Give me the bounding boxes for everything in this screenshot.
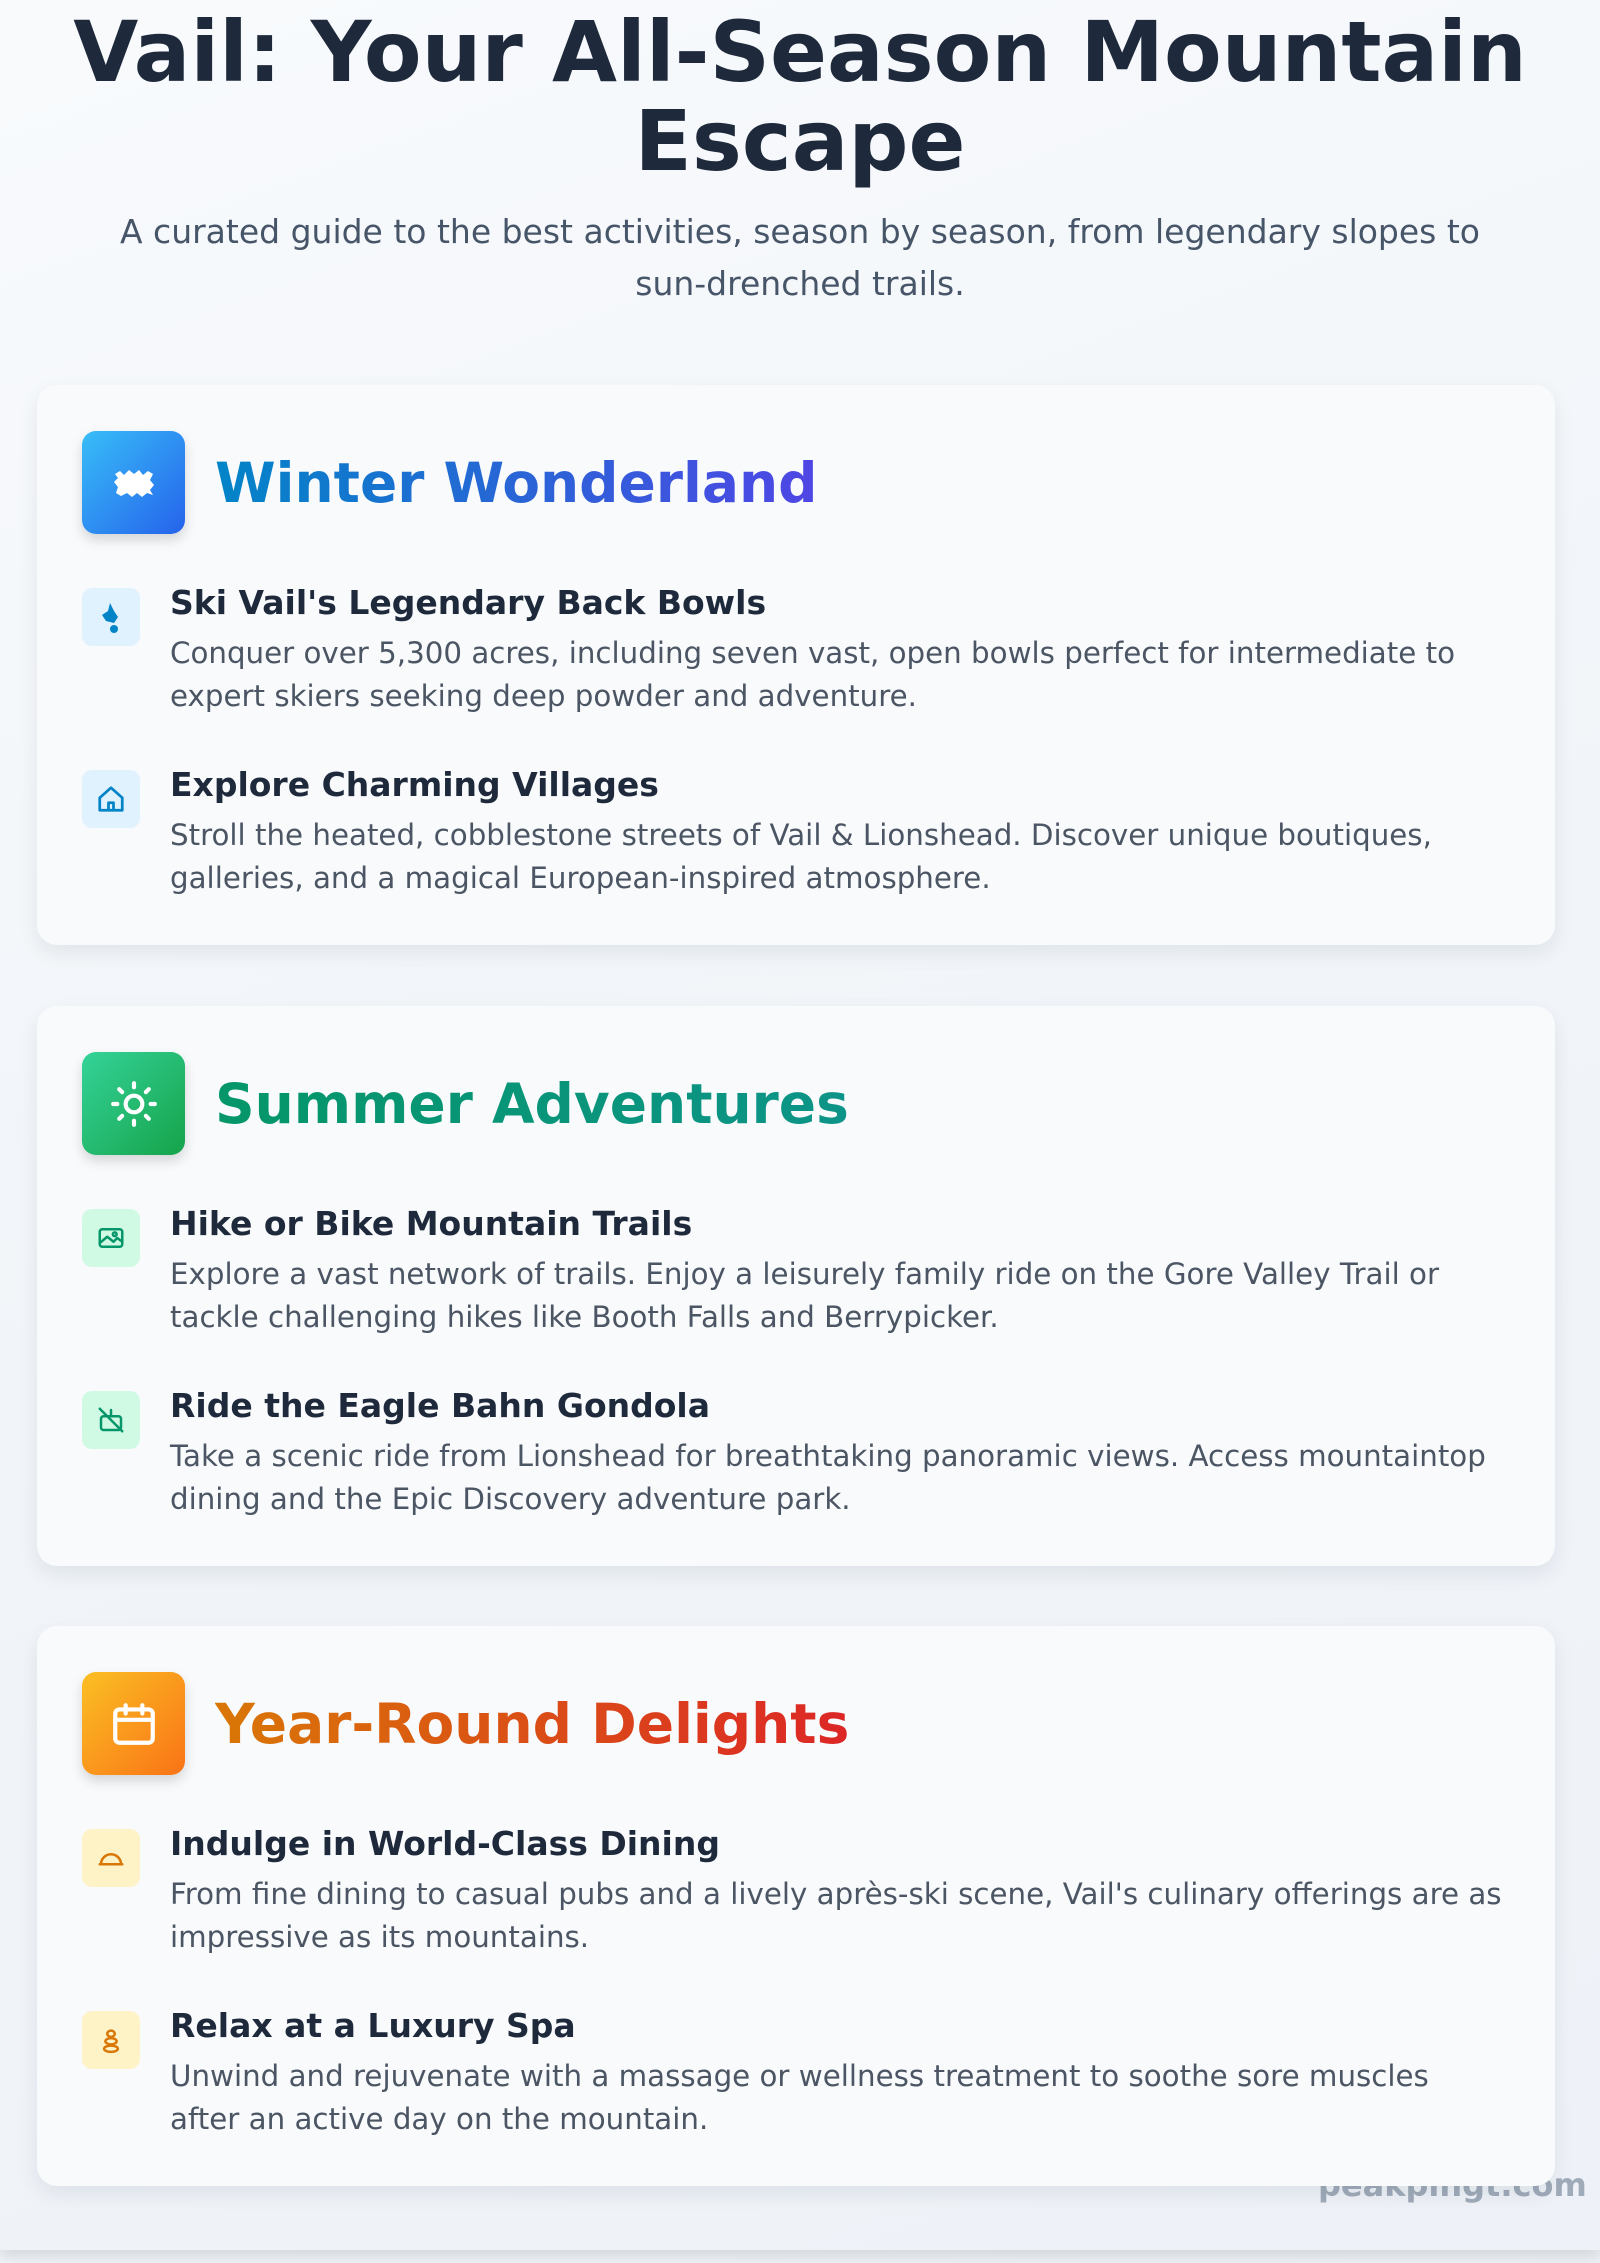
item: trails: Hike or Bike Mountain Trails bbox=[170, 1204, 692, 1243]
item: gondola: Take a scenic ride from Lionshead for breathtaking panoramic views. Access mountaintop dining and the Epic Discovery adventure park. bbox=[170, 1439, 1486, 1516]
title: Vail: Your All-Season Mountain bbox=[73, 3, 1527, 101]
item: villages bbox=[82, 765, 1432, 895]
heading: year-round: Year-Round Delights bbox=[215, 1692, 849, 1756]
item: villages: Explore Charming Villages bbox=[170, 765, 659, 804]
heading: winter bbox=[78, 431, 817, 544]
item: dining: Indulge in World-Class Dining bbox=[170, 1824, 720, 1863]
item: trails: Explore a vast network of trails. Enjoy a leisurely family ride on the Gore Valley Trail or tackle challenging hikes like Booth Falls and Berrypicker. bbox=[170, 1257, 1439, 1334]
panel: summer bbox=[37, 1006, 1555, 1566]
heading: winter: Winter Wonderland bbox=[215, 450, 817, 514]
heading: year-round bbox=[78, 1672, 849, 1786]
subtitle: A curated guide to the best activities, season by season, from legendary slopes to sun-drenched trails. bbox=[120, 212, 1480, 303]
item: spa: Unwind and rejuvenate with a massage or wellness treatment to soothe sore muscles after an active day on the mountain. bbox=[170, 2059, 1429, 2136]
item: villages: Stroll the heated, cobblestone streets of Vail & Lionshead. Discover unique boutiques, galleries, and a magical European-inspired atmosphere. bbox=[170, 818, 1432, 895]
item: back bowls bbox=[82, 583, 1455, 713]
item: dining bbox=[82, 1824, 1502, 1954]
panel: winter bbox=[37, 385, 1555, 945]
item: trails bbox=[82, 1204, 1440, 1334]
item: back bowls: Conquer over 5,300 acres, including seven vast, open bowls perfect for intermediate to expert skiers seeking deep powder and adventure. bbox=[170, 636, 1455, 713]
title: Escape bbox=[635, 92, 965, 190]
heading: summer bbox=[78, 1052, 849, 1166]
item: spa bbox=[82, 2006, 1429, 2136]
panel: year-round bbox=[37, 1626, 1555, 2186]
watermark: peakpingt.com bbox=[1318, 2166, 1587, 2204]
item: back bowls: Ski Vail's Legendary Back Bowls bbox=[170, 583, 766, 622]
item: gondola: Ride the Eagle Bahn Gondola bbox=[170, 1386, 710, 1425]
item: dining: From fine dining to casual pubs and a lively après-ski scene, Vail's culinary offerings are as impressive as its mountains. bbox=[170, 1877, 1502, 1954]
item: spa: Relax at a Luxury Spa bbox=[170, 2006, 576, 2045]
title bbox=[73, 3, 1527, 190]
item: gondola bbox=[82, 1386, 1486, 1516]
heading: summer: Summer Adventures bbox=[215, 1072, 849, 1136]
